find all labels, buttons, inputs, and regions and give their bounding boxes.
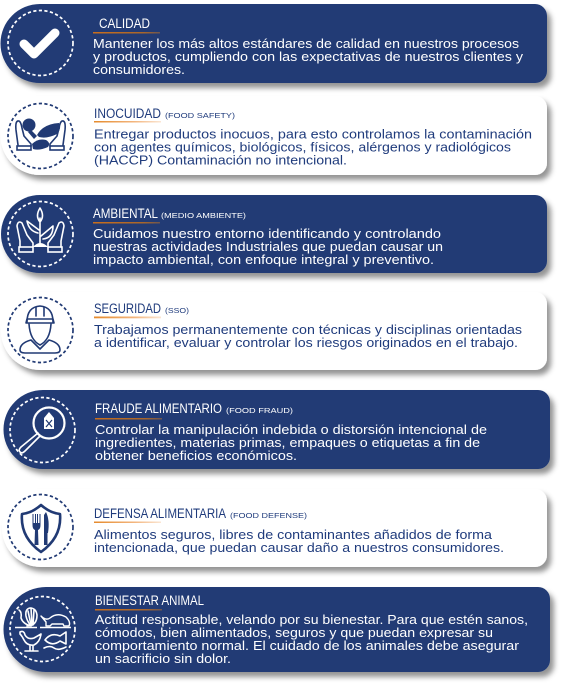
- panel: ambiental: [1, 195, 547, 273]
- text: bienestar animal: comportamiento normal. El cuidado de los animales debe asegurar: [95, 638, 520, 653]
- text: inocuidad: (HACCP) Contaminación no intencional.: [94, 152, 347, 168]
- text: calidad: Mantener los más altos estándares de calidad en nuestros procesos: [93, 36, 519, 51]
- text: calidad: consumidores.: [93, 62, 185, 77]
- text: seguridad: Trabajamos permanentemente con técnicas y disciplinas orientadas: [94, 322, 522, 337]
- text: calidad: y productos, cumpliendo con las expectativas de nuestros clientes y: [93, 49, 523, 64]
- text: inocuidad: [94, 126, 532, 168]
- panel: defensa alimentaria: [2, 489, 547, 567]
- heading: defensa alimentaria: DEFENSA ALIMENTARIA: [94, 506, 226, 521]
- text: defensa alimentaria: Alimentos seguros, libres de contaminantes añadidos de forma: [94, 527, 493, 542]
- chicken: [20, 631, 41, 651]
- heading: fraude alimentario: (FOOD FRAUD): [226, 406, 294, 415]
- icon: magnifier with tag: [10, 398, 75, 462]
- text: bienestar animal: cómodos, bien alimentados, seguros y que puedan expresar su: [95, 625, 493, 640]
- text: defensa alimentaria: [94, 527, 504, 555]
- text: ambiental: [93, 226, 443, 267]
- heading: ambiental: AMBIENTAL: [93, 206, 158, 221]
- heading: defensa alimentaria: [94, 506, 308, 523]
- text: fraude alimentario: [95, 422, 487, 463]
- text: bienestar animal: un sacrificio sin dolor.: [95, 651, 231, 666]
- icon: worker with helmet: [8, 298, 73, 362]
- text: fraude alimentario: Controlar la manipulación indebida o distorsión intencional de: [95, 422, 487, 437]
- icon: hands with food: [8, 104, 73, 168]
- panel: fraude alimentario: [4, 390, 550, 469]
- pig: [40, 615, 71, 628]
- text: bienestar animal: [95, 612, 528, 666]
- heading: bienestar animal: BIENESTAR ANIMAL: [95, 593, 204, 608]
- panel: seguridad: [1, 292, 547, 370]
- heading: seguridad: SEGURIDAD: [94, 301, 161, 316]
- icon: hands with plant: [8, 202, 73, 266]
- heading: fraude alimentario: [95, 401, 294, 420]
- text: fraude alimentario: ingredientes, materias primas, empaques o etiquetas a fin de: [95, 435, 480, 450]
- text: fraude alimentario: obtener beneficios económicos.: [95, 448, 297, 463]
- heading: ambiental: (MEDIO AMBIENTE): [161, 211, 247, 220]
- icon: shield with cutlery: [8, 494, 73, 560]
- turkey: [15, 608, 37, 628]
- text: bienestar animal: Actitud responsable, velando por su bienestar. Para que estén sanos,: [95, 612, 528, 627]
- panel: inocuidad: [1, 96, 547, 175]
- heading: seguridad: (SSO): [165, 306, 190, 315]
- heading: defensa alimentaria: (FOOD DEFENSE): [230, 511, 308, 520]
- text: ambiental: Cuidamos nuestro entorno identificando y controlando: [93, 226, 441, 241]
- text: seguridad: a identificar, evaluar y controlar los riesgos originados en el trabajo.: [94, 335, 518, 350]
- text: seguridad: [94, 322, 522, 350]
- heading: inocuidad: (FOOD SAFETY): [165, 111, 236, 120]
- text: inocuidad: Entregar productos inocuos, para esto controlamos la contaminación: [94, 126, 532, 142]
- heading: calidad: CALIDAD: [99, 16, 150, 31]
- text: ambiental: impacto ambiental, con enfoque integral y preventivo.: [93, 252, 434, 267]
- heading: fraude alimentario: FRAUDE ALIMENTARIO: [95, 401, 222, 416]
- text: inocuidad: con agentes químicos, biológicos, físicos, alérgenos y radiológicos: [94, 140, 511, 154]
- text: calidad: [93, 36, 523, 77]
- text: defensa alimentaria: intencionada, que puedan causar daño a nuestros consumidores.: [94, 540, 504, 555]
- panel: calidad: [1, 4, 547, 83]
- text: ambiental: nuestras actividades Industriales que puedan causar un: [93, 239, 443, 254]
- fish: [44, 632, 66, 649]
- heading: ambiental: [93, 206, 247, 224]
- icon: farm animals: [10, 596, 75, 662]
- heading: inocuidad: INOCUIDAD: [94, 106, 161, 121]
- icon: check mark: [8, 10, 73, 76]
- panel: bienestar animal: [4, 587, 550, 672]
- heading: inocuidad: [94, 106, 236, 122]
